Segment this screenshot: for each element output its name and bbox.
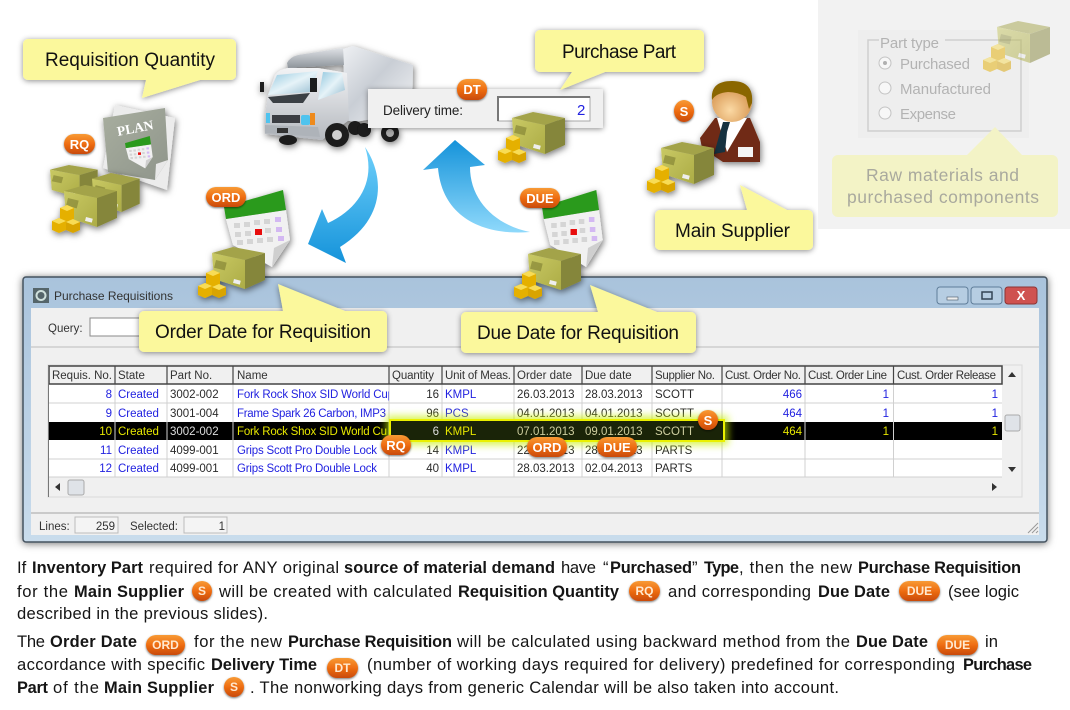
badge: S supplier — [674, 100, 694, 122]
badge: S in table — [698, 410, 718, 430]
row 8: SCOTT — [655, 389, 694, 401]
row 10 selected: Fork Rock Shox SID World Cu — [237, 426, 387, 438]
status bar: 1 — [219, 521, 225, 533]
badge: DUE inline 2: DUE — [945, 638, 970, 652]
text block: second paragraph: will be calculated using backward method from the — [456, 632, 850, 651]
row 10 selected: 1 — [992, 426, 998, 438]
text block: first paragraph: ” — [692, 558, 698, 577]
text block: second paragraph: Purchase — [963, 656, 1032, 674]
row 8: 1 — [992, 389, 998, 401]
row 10 selected: 10 — [99, 426, 112, 438]
text block: second paragraph: (number of working days required for delivery) predefined for corresponding — [367, 655, 955, 674]
icon: faded box — [983, 21, 1050, 72]
text block: first paragraph: Requisition Quantity — [458, 583, 620, 601]
panel: part type options: Manufactured — [900, 81, 991, 98]
panel: part type options — [858, 30, 1029, 138]
icon: supplier box — [647, 142, 714, 193]
row 9: 04.01.2013 — [517, 408, 575, 420]
row 12: 02.04.2013 — [585, 463, 643, 475]
panel: faded part type — [818, 0, 1070, 229]
highlight: selected row fields: 07.01.2013 — [517, 426, 575, 438]
text block: second paragraph: accordance with specific — [17, 655, 205, 674]
badge: DT — [457, 79, 487, 100]
row 12: 28.03.2013 — [517, 463, 575, 475]
row 8: 26.03.2013 — [517, 389, 575, 401]
row 11: 4099-001 — [170, 445, 219, 457]
text block: second paragraph: Purchase Requisition — [288, 633, 452, 651]
callout: Order Date for Requisition — [139, 284, 387, 352]
row 9: PCS — [445, 408, 469, 420]
row 9: 1 — [883, 408, 889, 420]
badge: RQ inline: RQ — [636, 584, 654, 598]
row 8: 3002-002 — [170, 389, 219, 401]
row 12 — [99, 463, 693, 475]
window buttons: X — [1017, 288, 1026, 303]
panel: part type options: Purchased — [900, 56, 970, 73]
callout: Requisition Quantity: Requisition Quantity — [45, 50, 216, 71]
row 8: 1 — [883, 389, 889, 401]
panel: delivery time field: 2 — [577, 102, 585, 119]
callout: raw materials — [832, 127, 1058, 217]
row 10 selected: 464 — [783, 426, 803, 438]
table header: Name — [237, 370, 268, 382]
icon: cardboard boxes — [50, 165, 140, 233]
row 11: PARTS — [655, 445, 693, 457]
table header: Part No. — [170, 370, 212, 382]
row 9: 04.01.2013 — [585, 408, 643, 420]
row 12: 40 — [426, 463, 439, 475]
badge: S inline — [192, 581, 212, 601]
icon: supplier person — [700, 81, 760, 162]
text block: second paragraph: Part — [17, 679, 49, 697]
status bar — [39, 517, 1038, 533]
badge: DUE inline — [899, 581, 940, 601]
callout: Requisition Quantity — [23, 39, 236, 98]
table header: Unit of Meas. — [445, 370, 511, 382]
text block: second paragraph: Delivery Time — [211, 656, 317, 674]
icon: due date calendar — [514, 190, 603, 299]
table header: Cust. Order Line — [808, 370, 887, 382]
table header: Requis. No. — [52, 370, 112, 382]
row 9 — [106, 408, 998, 420]
query field: Query: — [48, 323, 83, 335]
badge: ORD in table: ORD — [533, 440, 561, 455]
status bar: Selected: — [130, 521, 178, 533]
badge: DUE inline 2 — [937, 635, 978, 655]
row 10 selected: Created — [118, 426, 159, 438]
row 12: 12 — [99, 463, 112, 475]
panel: part type options: Part type — [880, 35, 939, 52]
row 8: 16 — [426, 389, 439, 401]
row 9: Frame Spark 26 Carbon, IMP3 — [237, 408, 386, 420]
text block: first paragraph: If — [17, 558, 27, 577]
badge: S inline: S — [198, 584, 206, 598]
text block: first paragraph: Type — [704, 559, 739, 577]
table header: Cust. Order Release — [897, 370, 996, 382]
icon: window icon — [33, 288, 49, 303]
panel: delivery time field: Delivery time: — [383, 103, 463, 118]
callout: Due Date for Requisition — [461, 285, 696, 353]
badge: DT: DT — [463, 82, 481, 97]
callout: Main Supplier — [655, 185, 813, 250]
text block: first paragraph: and corresponding — [668, 582, 811, 601]
row 8: 466 — [783, 389, 802, 401]
text block: first paragraph: , then the new — [739, 558, 853, 577]
text block: second paragraph: Main Supplier — [104, 679, 215, 697]
text block: first paragraph: “ — [603, 558, 609, 577]
badge: RQ in table: RQ — [386, 438, 406, 453]
badge: RQ: RQ — [70, 137, 89, 152]
icon: plan documents with boxes — [50, 105, 175, 233]
table header: State — [118, 370, 145, 382]
row 9: 1 — [992, 408, 998, 420]
row 11: Grips Scott Pro Double Lock — [237, 445, 377, 457]
row 11: 22.03.2013 — [517, 445, 575, 457]
table rows — [99, 389, 998, 475]
text block: first paragraph: have — [561, 558, 596, 577]
text block: second paragraph: of the — [53, 678, 99, 697]
row 9: 464 — [783, 408, 803, 420]
badge: DUE inline: DUE — [907, 584, 932, 598]
icon: plan document: PLAN — [116, 117, 155, 139]
arrow: curved up-left — [423, 140, 530, 232]
panel: Purchase Requisitions window — [23, 277, 1047, 542]
badge: S supplier: S — [680, 104, 689, 119]
badge: DUE: DUE — [526, 191, 554, 206]
table header: Quantity — [392, 370, 434, 382]
text block: second paragraph — [17, 632, 1032, 697]
row 11: Created — [118, 445, 159, 457]
text block: first paragraph: will be created with calculated — [218, 582, 452, 601]
row 10 selected — [99, 426, 998, 438]
highlight: selected row fields: SCOTT — [655, 426, 694, 438]
row 10 selected: 1 — [883, 426, 889, 438]
text block: first paragraph: Due Date — [818, 583, 890, 601]
highlight: selected row fields: KMPL — [445, 426, 477, 438]
table: requisitions — [48, 365, 1022, 497]
text block: first paragraph — [17, 558, 1021, 623]
row 8: 28.03.2013 — [585, 389, 643, 401]
table header: Due date — [585, 370, 632, 382]
panel: part type options: Expense — [900, 106, 956, 123]
row 8: Fork Rock Shox SID World Cup — [237, 389, 394, 401]
badge: S in table: S — [704, 413, 713, 428]
row 9: Created — [118, 408, 159, 420]
table header: Supplier No. — [655, 370, 715, 382]
text block: first paragraph: Purchased — [610, 559, 692, 577]
row 12: PARTS — [655, 463, 693, 475]
icon: delivery truck — [260, 46, 413, 147]
row 10 selected: 3002-002 — [170, 426, 219, 438]
text block: first paragraph: for the — [17, 582, 68, 601]
badge: DT inline: DT — [334, 661, 351, 675]
panel: delivery time field — [368, 89, 603, 128]
badge: DUE in table — [597, 437, 637, 457]
text block: first paragraph: required for ANY original — [149, 558, 339, 577]
text block: first paragraph: source of material demand — [344, 559, 555, 577]
badge: DT inline — [327, 658, 358, 678]
row 12: Grips Scott Pro Double Lock — [237, 463, 377, 475]
query field — [48, 318, 150, 336]
callout: Order Date for Requisition: Order Date for Requisition — [155, 322, 371, 343]
text block: first paragraph: (see logic — [948, 582, 1019, 601]
row 9: 96 — [426, 408, 439, 420]
row 11: 14 — [426, 445, 440, 457]
text block: first paragraph: Purchase Requisition — [858, 559, 1021, 577]
text block: second paragraph: Order Date — [50, 633, 137, 651]
callout: raw materials: Raw materials and — [866, 165, 1019, 185]
icon: order date calendar — [198, 190, 290, 298]
row 11: 28.03.2013 — [585, 445, 643, 457]
callout: Purchase Part — [535, 30, 704, 90]
status bar: Lines: — [39, 521, 70, 533]
badge: ORD inline — [146, 635, 185, 655]
row 8: KMPL — [445, 389, 477, 401]
table header — [52, 370, 996, 382]
row 9: 3001-004 — [170, 408, 219, 420]
text block: second paragraph: . The nonworking days from generic Calendar will be also taken into account. — [250, 678, 839, 697]
icon: purchase part box — [498, 112, 565, 163]
arrow: curved down-left — [308, 147, 378, 263]
highlight: selected row fields: 6 — [433, 426, 439, 438]
badge: RQ inline — [629, 581, 660, 601]
table header: Cust. Order No. — [725, 370, 801, 382]
badge: ORD inline: ORD — [152, 638, 179, 652]
text block: second paragraph: The — [17, 632, 45, 651]
row 12: KMPL — [445, 463, 477, 475]
text block: first paragraph: Main Supplier — [74, 583, 185, 601]
row 11 — [100, 445, 693, 457]
badge: ORD — [206, 187, 246, 207]
badge: ORD: ORD — [212, 190, 240, 205]
text block: second paragraph: for the new — [194, 632, 283, 651]
badge: S inline 2: S — [230, 680, 238, 694]
callout: raw materials: purchased components — [847, 187, 1039, 207]
row 9: SCOTT — [655, 408, 694, 420]
row 12: Created — [118, 463, 159, 475]
row 9: 9 — [106, 408, 112, 420]
scrollbars — [55, 372, 1020, 495]
text block: second paragraph: Due Date — [856, 633, 928, 651]
row 8 — [106, 389, 998, 401]
badge: RQ — [64, 134, 95, 154]
row 8: 8 — [106, 389, 112, 401]
callout: Purchase Part: Purchase Part — [562, 42, 677, 63]
title bar text: Purchase Requisitions — [54, 289, 173, 303]
badge: RQ in table — [381, 435, 411, 455]
text block: first paragraph: described in the previous slides). — [17, 604, 268, 623]
table header: Order date — [517, 370, 572, 382]
row 12: 4099-001 — [170, 463, 219, 475]
text block: second paragraph: in — [985, 632, 998, 651]
badge: ORD in table — [527, 437, 567, 457]
row 8: Created — [118, 389, 159, 401]
callout: Due Date for Requisition: Due Date for Requisition — [477, 323, 679, 344]
row 11: KMPL — [445, 445, 477, 457]
callout: Main Supplier: Main Supplier — [675, 221, 791, 242]
badge: DUE — [520, 188, 560, 208]
text block: first paragraph: Inventory Part — [32, 559, 144, 577]
highlight: selected row fields: 09.01.2013 — [585, 426, 643, 438]
window buttons — [937, 287, 1037, 304]
status bar: 259 — [96, 521, 115, 533]
highlight: selected row fields — [386, 416, 728, 445]
row 11: 11 — [100, 445, 112, 457]
badge: S inline 2 — [224, 677, 244, 697]
badge: DUE in table: DUE — [603, 440, 631, 455]
